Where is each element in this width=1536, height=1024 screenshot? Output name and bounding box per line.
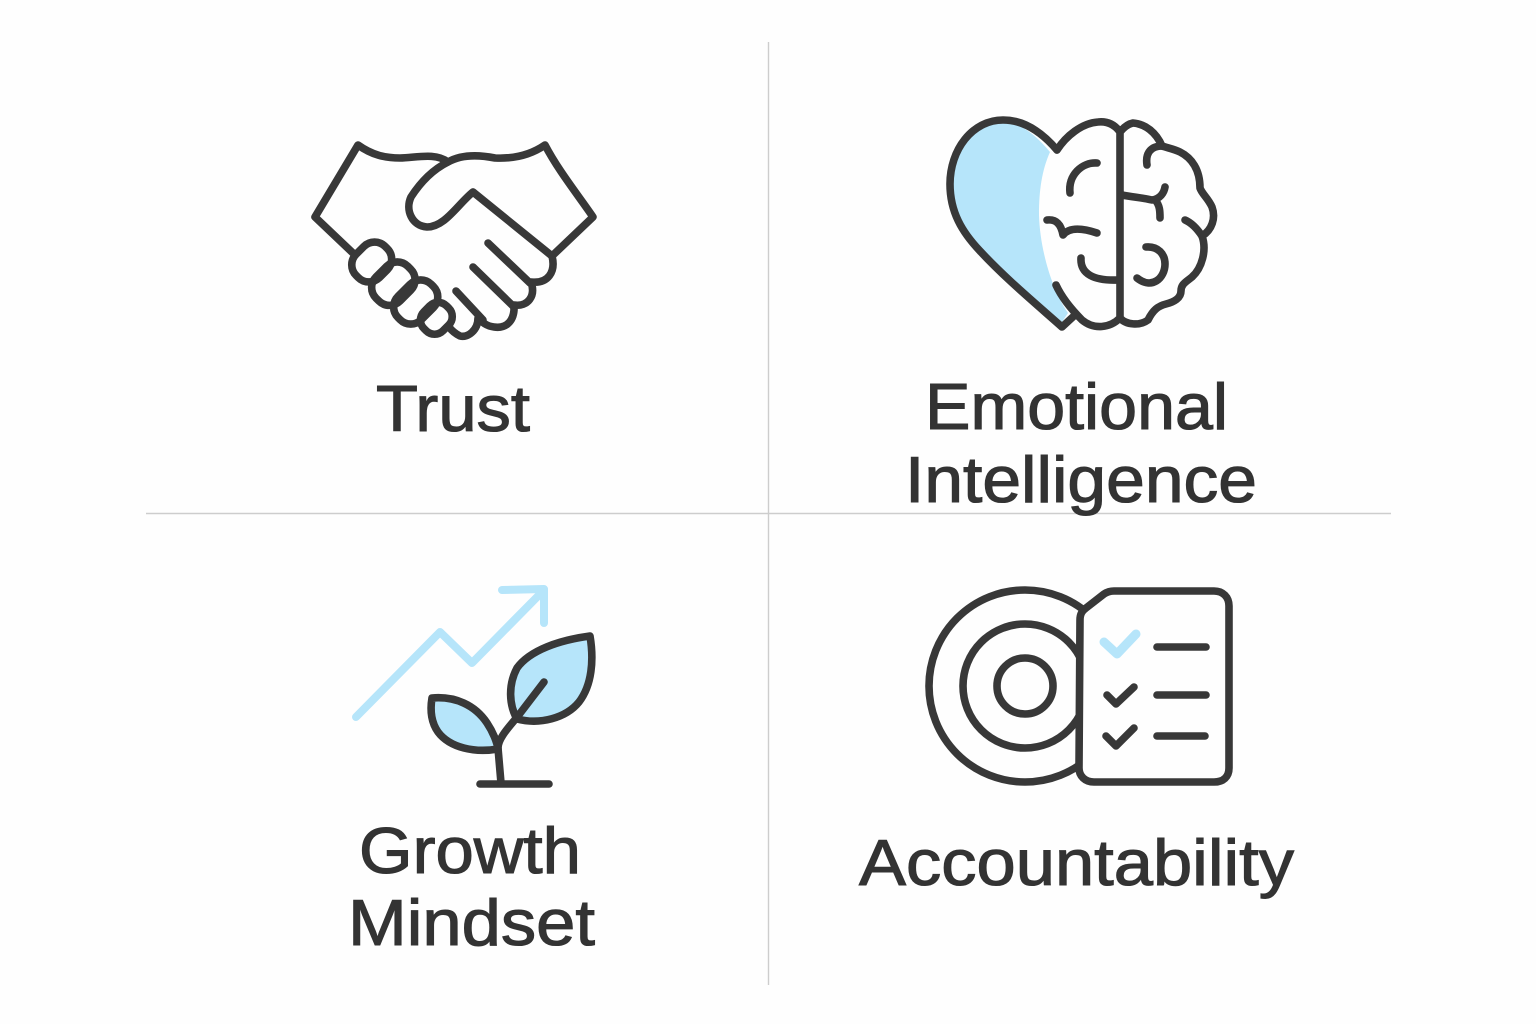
heading: Trust: Trust [376, 372, 530, 445]
panel: growth mindset [348, 589, 595, 959]
icon: left hand fingers [346, 236, 457, 339]
panel: emotional intelligence [905, 120, 1257, 516]
heart outline [950, 120, 1075, 327]
heart fill [951, 122, 1068, 322]
leaf fills [432, 637, 591, 749]
heading: Emotional Intelligence: Intelligence [905, 443, 1257, 516]
check: blue [1104, 634, 1136, 654]
icon: target [929, 590, 1121, 782]
heading: Emotional Intelligence: Emotional [925, 370, 1228, 443]
panel: trust [315, 145, 593, 445]
heading: Growth Mindset: Growth [359, 814, 581, 887]
icon: heart and brain [950, 120, 1214, 327]
heading: Emotional Intelligence [905, 370, 1257, 516]
panel: accountability [859, 590, 1295, 899]
heading: Accountability: Accountability [859, 826, 1295, 899]
brain outline [1056, 122, 1214, 327]
icon: growth arrow [356, 589, 544, 717]
heading: Growth Mindset [348, 814, 595, 959]
icon: sprout [431, 636, 592, 784]
icon: handshake [315, 145, 593, 339]
icon: checklist [1079, 591, 1229, 782]
heading: Growth Mindset: Mindset [348, 886, 595, 959]
